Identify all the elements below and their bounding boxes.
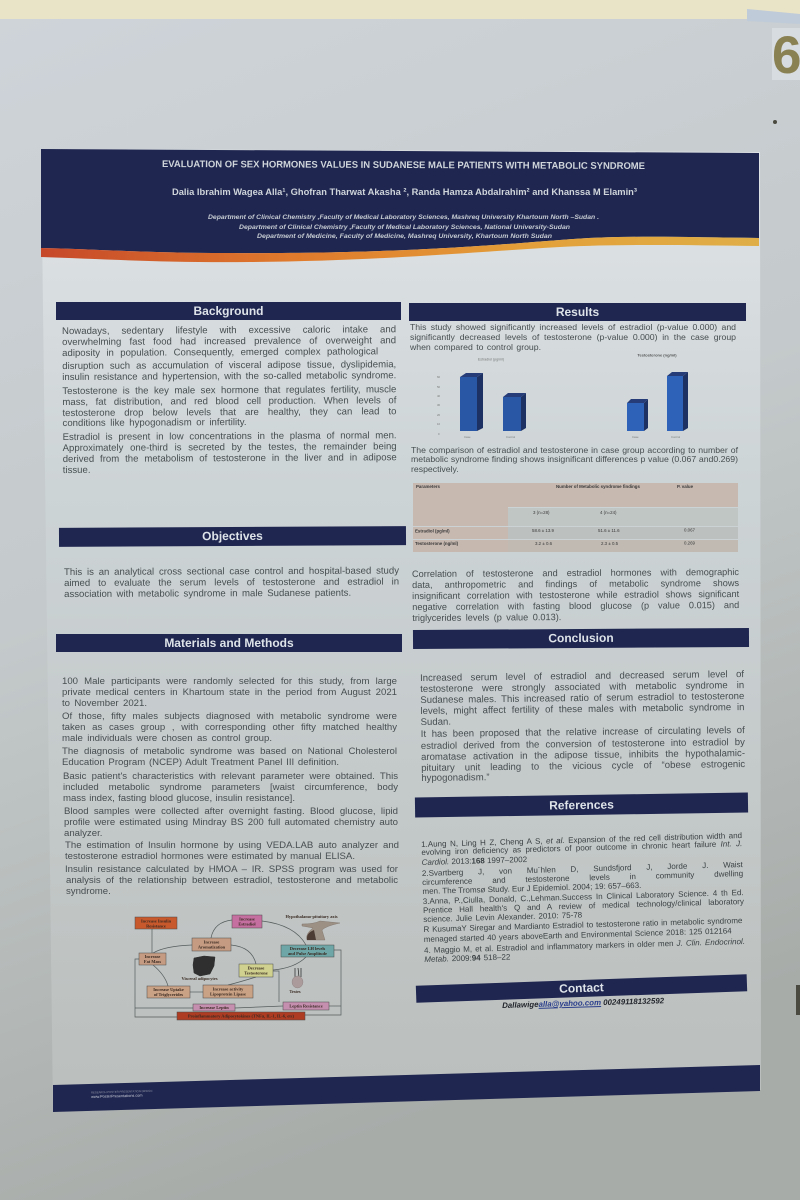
box: increase activity lipoprotein lipase: Lipoprotein Lipase — [210, 992, 246, 996]
bar chart: estradiol — [437, 358, 526, 439]
text: references — [421, 831, 745, 963]
heading: Objectives: Objectives — [202, 529, 263, 543]
text: correlation paragraph — [412, 567, 740, 623]
text: materials and methods: syndrome. — [66, 886, 111, 896]
heading: Conclusion — [413, 628, 749, 649]
text: materials and methods: taken as cases group , with corresponding other fifty matched healthy — [62, 722, 397, 733]
text: objectives: aimed to evaluate the serum levels of testosterone and estradiol in — [64, 577, 399, 589]
text: objectives — [64, 566, 399, 600]
text: materials and methods: male individuals were chosen as control group. — [62, 732, 272, 744]
box: increase estradiol: Estradiol — [238, 922, 256, 926]
text: conclusion: levels, might affect fertility of these males with metabolic syndrome in — [420, 702, 745, 716]
text: comparison paragraph — [411, 444, 738, 474]
box: increase leptin — [193, 1004, 235, 1011]
navy wave — [41, 149, 759, 253]
table: parameters by metabolic syndrome findings: 4 (n=24) — [600, 510, 617, 515]
box: increase fat mass — [139, 953, 166, 965]
box: leptin resistance: Leptin Resistance — [289, 1004, 323, 1009]
box: increase estradiol — [232, 915, 262, 928]
footer band — [53, 1065, 760, 1112]
table: parameters by metabolic syndrome findings: 3 (n=28) — [533, 510, 550, 515]
bar chart: estradiol: 0 — [438, 432, 440, 436]
box: increase uptake of triglycerides: Increase Uptake — [153, 987, 184, 992]
text: background: mass, fat distribution, and red blood cell production. When levels of — [62, 395, 396, 407]
header banner — [41, 149, 759, 262]
text: background: tissue. — [63, 464, 91, 475]
box: increase aromatization — [192, 938, 231, 951]
heading: Background — [56, 302, 401, 320]
table: parameters by metabolic syndrome findings: Parameters — [416, 484, 440, 489]
text: conclusion — [420, 669, 745, 783]
table: parameters by metabolic syndrome findings: Testosterone (ng/ml) — [415, 541, 459, 546]
text: references: R KusumaY Siregar and Mardianto Estradiol to testosterone ratio in metabolic syndrome — [423, 916, 743, 933]
heading: Objectives — [59, 526, 406, 547]
table: parameters by metabolic syndrome findings: 0.269 — [684, 540, 696, 546]
heading: Materials and Methods — [56, 634, 402, 652]
bar: control: Control — [506, 435, 515, 439]
table: parameters by metabolic syndrome findings: Estradiol (pg/ml) — [415, 528, 450, 534]
icon: testes: Testes — [289, 989, 301, 994]
text: conclusion: Sudanese males. This increased ratio of serum estradiol to testosterone — [420, 691, 744, 705]
box: decrease LH levels: Decrease LH levels — [290, 946, 326, 951]
text: materials and methods: Insulin resistance calculated by HMOA – IR. SPSS program was used for — [65, 864, 398, 875]
box: increase aromatization: Aromatization — [198, 944, 226, 950]
authors: Dalia Ibrahim Wagea Alla¹, Ghofran Tharwat Akasha ², Randa Hamza Abdalrahim² and Khanssa M Elamin³ — [172, 187, 637, 198]
footer link: www.PosterPresentations.com — [91, 1094, 143, 1099]
box: leptin resistance — [283, 1002, 329, 1010]
text: conclusion: Increased serum level of estradiol and decreased serum level of — [420, 669, 744, 683]
text: contact details: Dallawigealla@yahoo.com 00249118132592 — [502, 996, 664, 1010]
text: materials and methods: analysis of the relationship between estradiol, testosterone and metabolic — [66, 875, 398, 886]
icon: testes — [289, 968, 303, 994]
text: objectives: association with metabolic syndrome in male Sudanese patients. — [64, 588, 351, 600]
text: materials and methods: 100 Male participants were randomly selected for this study, from large — [62, 676, 397, 686]
bar chart: estradiol: 20 — [437, 413, 441, 417]
table: parameters by metabolic syndrome findings: 2.3 ± 0.5 — [601, 541, 619, 546]
connectors — [135, 920, 341, 1017]
bar chart: estradiol: 10 — [437, 422, 441, 426]
text: conclusion: It has been proposed that the relative increase of circulating levels of — [421, 725, 745, 739]
box: decrease testosterone: Testosterone — [244, 970, 268, 976]
text: comparison paragraph: metabolic syndrome finding shows insignificant differences p value (0.067 and0.269) — [411, 454, 738, 464]
box: increase uptake of triglycerides — [147, 986, 190, 998]
text: background: conditions like hypogonadism or infertility. — [62, 417, 247, 428]
bar chart: estradiol: 60 — [437, 375, 441, 379]
text: references: menaged started 40 years aboveEarth and Environmental Science 2018: 125 012164 — [424, 926, 732, 943]
table: parameters by metabolic syndrome findings: 51.6 ± 11.6 — [598, 528, 620, 533]
box: increase insulin resistance: Increase Insulin — [141, 918, 172, 924]
affiliations: Department of Medicine, Faculty of Medicine, Mashreq University, Khartoum North Sudan — [257, 233, 552, 240]
text: references: Cardiol. 2013:168 1997–2002 — [422, 855, 527, 866]
title: EVALUATION OF SEX HORMONES VALUES IN SUDANESE MALE PATIENTS WITH METABOLIC SYNDROME — [162, 159, 646, 172]
bar: control: Control — [671, 435, 680, 439]
bar chart: testosterone — [627, 352, 688, 439]
text: correlation paragraph: negative correlation with fasting blood glucose (p value 0.015) and — [412, 600, 739, 611]
text: background: overwhelming fast food had increased prevalence of overweight and — [62, 335, 396, 347]
box: decrease LH levels: and Pulse Amplitude — [288, 951, 327, 956]
diagram: metabolic syndrome hormone cycle — [134, 914, 342, 1020]
text: background: Nowadays, sedentary lifestyle with excessive caloric intake and — [62, 324, 396, 336]
table: parameters by metabolic syndrome findings: Number of Metabolic syndrome findings — [556, 484, 640, 489]
text: materials and methods: mass index, fasting blood glucose, insulin resistance]. — [63, 792, 295, 804]
text: materials and methods: testosterone estradiol hormones were estimated by manual ELISA. — [65, 851, 355, 862]
text: background: Testosterone is the key male sex hormone that regulates fertility, muscle — [62, 384, 396, 396]
text: references: circumference and testosterone levels in community dwelling — [422, 869, 743, 886]
box: decrease testosterone: Decrease — [248, 966, 264, 970]
text: background: insulin resistance and hypertension, with the so-called metabolic syndrome. — [62, 370, 396, 382]
box: increase activity lipoprotein lipase: Increase activity — [213, 986, 244, 992]
box: proinflammatory adipocytokines: Proinflammatory Adipocytokines (TNFα, IL-1, IL-6, etc) — [188, 1014, 295, 1019]
text: background: Estradiol is present in low concentrations in the plasma of normal men. — [63, 430, 397, 442]
text: references: Metab. 2009:94 518–22 — [424, 952, 510, 963]
heading: References: References — [549, 798, 614, 812]
icon: visceral adipocytes: Visceral adipocytes — [181, 976, 218, 981]
text: materials and methods: The diagnosis of metabolic syndrome was based on National Cholesterol — [62, 746, 397, 757]
bar chart: testosterone: Testosterone (ng/ml) — [637, 352, 677, 358]
text: materials and methods: Blood samples were collected after overnight fasting. Blood glucose, lipid — [64, 806, 398, 816]
affiliations: Department of Clinical Chemistry ,Faculty of Medical Laboratory Sciences, National University-Sudan — [239, 224, 570, 231]
table: parameters by metabolic syndrome findings: 0.067 — [684, 528, 696, 532]
icon: hypothalamo-pituitary axis — [285, 914, 340, 940]
icon: visceral adipocytes — [181, 956, 218, 981]
text: background: adiposity in population. Consequently, emerged complex pathological — [62, 346, 378, 358]
text: materials and methods: Education Program (NCEP) Adult Treatment Panel III definition. — [62, 757, 339, 768]
bar chart: estradiol: 50 — [437, 385, 441, 389]
text: correlation paragraph: data, anthropometric and findings of metabolic syndrome shows — [412, 578, 739, 589]
text: references: Prentice Hall health's Q and A review of medical technology/clinical laboratory — [423, 897, 744, 914]
footer link — [91, 1089, 153, 1099]
bar: case: Case — [632, 435, 639, 439]
text: correlation paragraph: triglycerides levels (p value 0.013). — [412, 612, 561, 622]
text: results intro: when compared to control group. — [410, 342, 541, 352]
box: increase uptake of triglycerides: of Triglycerides — [154, 992, 183, 997]
text: materials and methods: analyzer. — [64, 828, 102, 838]
text: results intro: significantly decreased levels of testosterone (p-value 0.000) in the case group — [410, 332, 736, 342]
heading: References — [415, 793, 748, 817]
box: increase leptin: Increase Leptin — [199, 1005, 229, 1010]
bar chart: estradiol: 40 — [437, 394, 441, 398]
box: increase insulin resistance: Resistance — [146, 924, 166, 928]
text: conclusion: estradiol derived from the conversion of testosterone into estradiol by — [421, 737, 745, 751]
text: references: 1.Aung N, Ling H Z, Cheng A S, et al. Expansion of the red cell distribution width and — [421, 831, 742, 848]
heading: Background: Background — [193, 304, 264, 318]
text: materials and methods: The estimation of Insulin hormone by using VEDA.LAB auto analyzer and — [65, 840, 399, 851]
text: references: evolving iron deficiency as predictors of poor outcome in chronic heart failure Int. J. — [421, 839, 742, 856]
text: background: derived from the metabolism of testosterone in the liver and in adipose — [63, 452, 397, 464]
box: proinflammatory adipocytokines — [177, 1012, 305, 1020]
text: background: Approximately one-third is secreted by the testes, the remainder being — [63, 441, 397, 453]
box: increase activity lipoprotein lipase — [203, 985, 253, 998]
text: background: disruption such as accumulation of visceral adipose tissue, dyslipidemia, — [62, 359, 396, 371]
bar chart: estradiol: 30 — [437, 403, 441, 407]
text: conclusion: testosterone were strongly associated with metabolic syndrome in — [420, 680, 744, 694]
heading: Contact — [416, 974, 747, 1003]
text: references: men. The Tromsø Study. Eur J Epidemiol. 2004; 19: 657–663. — [422, 880, 641, 895]
text: comparison paragraph: respectively. — [411, 464, 459, 474]
text: references: 4. Maggio M, et al. Estradiol and inflammatory markers in older men J. Clin. Endocrinol. — [424, 936, 745, 954]
heading: Conclusion: Conclusion — [548, 631, 614, 645]
text: conclusion: Sudan. — [421, 716, 451, 727]
footer link: RESEARCH POSTER PRESENTATION DESIGN — [91, 1089, 152, 1095]
heading: Results — [409, 303, 746, 321]
text: materials and methods: profile were estimated using Mindray BS 200 full automated chemistry auto — [64, 816, 398, 828]
box: increase fat mass: Fat Mass — [144, 959, 161, 964]
heading: Results: Results — [556, 305, 599, 319]
icon: hypothalamo-pituitary axis: Hypothalamo-pituitary axis — [285, 914, 338, 919]
text: conclusion: pituitary unit leading to the vicious cycle of “obese estrogenic — [421, 759, 745, 773]
box: increase insulin resistance — [135, 917, 177, 929]
affiliations — [208, 214, 599, 240]
text: background — [62, 324, 397, 475]
box: decrease testosterone — [239, 964, 273, 977]
text: references: science. Julie Levin Alexander. 2010: 75-78 — [423, 910, 582, 923]
affiliations: Department of Clinical Chemistry ,Faculty of Medical Laboratory Sciences, Mashreq University Khartoum North –Sudan . — [208, 214, 599, 221]
text: materials and methods: to November 2021. — [62, 698, 147, 708]
text: references: 2.Svartberg J, von Mu¨hlen D, Sundsfjord J, Jorde J. Waist — [422, 860, 743, 877]
box: decrease LH levels — [281, 945, 334, 957]
text: materials and methods: Of those, fifty males subjects diagnosed with metabolic syndrome were — [62, 711, 397, 722]
text: materials and methods: Basic patient's characteristics with relevant parameter were obtained. This — [63, 771, 398, 782]
text: materials and methods — [62, 676, 399, 896]
heading: Materials and Methods: Materials and Methods — [164, 636, 294, 650]
text: objectives: This is an analytical cross sectional case control and hospital-based study — [64, 566, 399, 578]
bar: case: Case — [464, 435, 471, 439]
text: results intro: This study showed significantly increased levels of estradiol (p-value 0.000) and — [410, 322, 736, 332]
text: materials and methods: private medical centers in Khartoum state in the period from August 2021 — [62, 687, 397, 698]
heading: Contact: Contact — [559, 980, 604, 996]
bar chart: estradiol: Estradiol (pg/ml) — [478, 358, 504, 362]
text: results intro — [410, 322, 736, 352]
text: conclusion: aromatase activation in the adipose tissue, inhibits the hypothalamic- — [421, 748, 745, 762]
box: increase aromatization: Increase — [204, 940, 219, 944]
text: references: 3.Anna, P.,Ciulla, Donald, C.,Lehman.Success In Clinical Laboratory Science. 4 th Ed. — [423, 888, 744, 905]
text: materials and methods: included metabolic syndrome parameters [waist circumference, body — [63, 782, 398, 792]
text: comparison paragraph: The comparison of estradiol and testosterone in case group according to number of — [411, 444, 738, 454]
text: background: testosterone drop below levels that are healthy, they can lead to — [62, 406, 396, 418]
text: correlation paragraph: Correlation of testosterone and estradiol hormones with demographic — [412, 567, 739, 578]
box: increase estradiol: Increase — [239, 916, 255, 922]
table: parameters by metabolic syndrome findings: P. value — [677, 484, 694, 489]
box: increase fat mass: Increase — [145, 954, 160, 959]
text: conclusion: hypogonadism.” — [421, 772, 490, 783]
orange wave — [41, 237, 759, 262]
table: parameters by metabolic syndrome findings: 3.2 ± 0.6 — [535, 541, 553, 546]
table: parameters by metabolic syndrome findings: 58.6 ± 13.9 — [532, 528, 554, 533]
table: parameters by metabolic syndrome findings — [413, 483, 738, 552]
text: correlation paragraph: insignificant correlation with testosterone while estradiol shows significant — [412, 589, 739, 600]
